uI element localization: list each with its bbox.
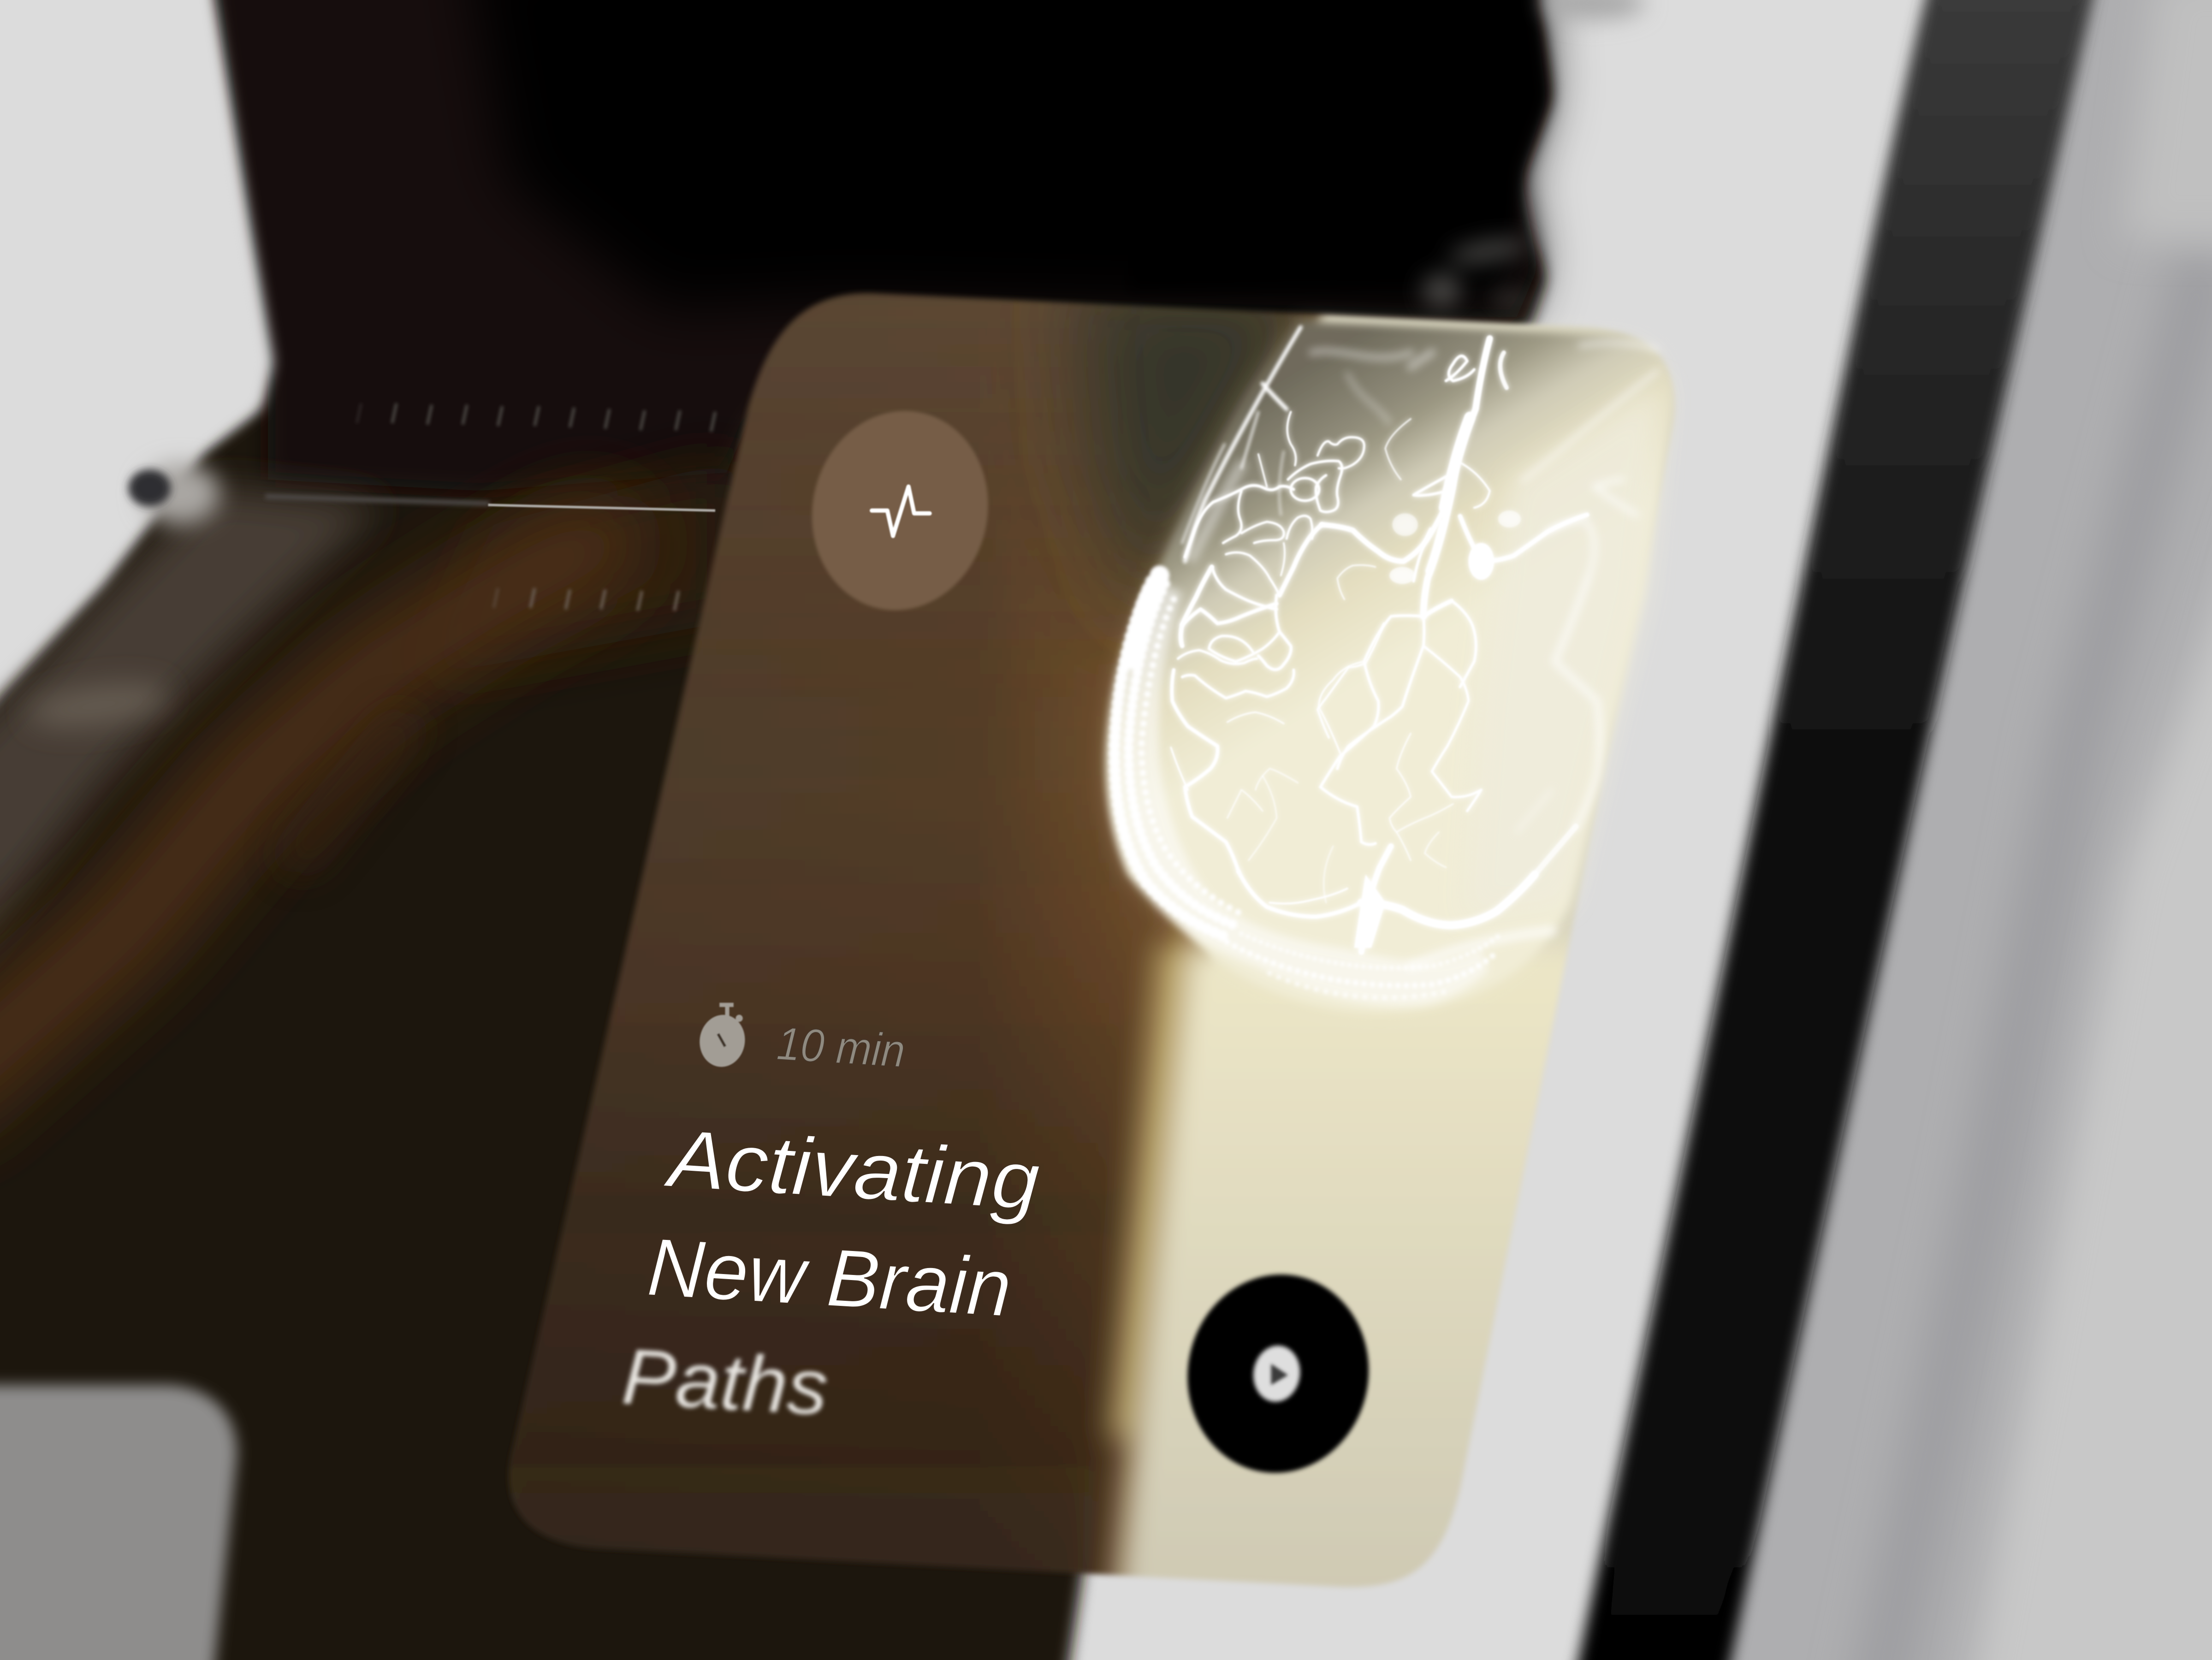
background: grey brown wedge under light panel (0, 486, 381, 973)
button disc (1172, 1260, 1384, 1487)
background: second thin streak (301, 730, 401, 855)
duration label: 10 min (775, 1018, 907, 1077)
panel: lesson card (480, 268, 1707, 1622)
background: brown hair streak (0, 543, 593, 1089)
brain right pale tissue (1467, 381, 1662, 917)
play button (1172, 1260, 1384, 1487)
lower tick marks (494, 588, 679, 611)
central branching vessels (1248, 522, 1481, 903)
circle backdrop (794, 394, 1007, 627)
play triangle (1271, 1364, 1288, 1385)
upper tick marks (357, 403, 715, 432)
title line 2: New Brain (645, 1221, 1014, 1334)
card brown shading (480, 268, 1171, 1622)
title line 3: Paths (620, 1333, 830, 1432)
bottom arc vessel (1239, 826, 1576, 952)
background: lighter patch in wedge (26, 676, 172, 735)
card upper olive shadow (1072, 268, 1354, 634)
icon: stopwatch (696, 1003, 748, 1070)
background: pale area far right (1964, 423, 2212, 1660)
brain scan image (1108, 321, 1670, 1012)
background: grey panel right of bar (1665, 0, 2212, 1660)
background: light panel edge restore (0, 0, 272, 741)
tortuous left vessels (1178, 412, 1411, 738)
brain outer glow (1108, 321, 1670, 1012)
skull band beads (1115, 575, 1498, 998)
lower left vessels (1171, 525, 1322, 872)
skull band solid (1108, 578, 1489, 1005)
background: grey blurred card, lower left (0, 1385, 237, 1660)
faded right vessels (1411, 343, 1658, 966)
background: upper right pale wedge (2123, 0, 2212, 240)
background: brown glow upper right of hair (423, 458, 734, 677)
background: crisp black edge of hair (1128, 0, 1546, 289)
card base gradient (508, 291, 1326, 1579)
faint upper vessels (1192, 351, 1432, 557)
background: soft highlight around slider knob (141, 462, 220, 525)
background: near black upper block (212, 0, 1546, 491)
background: top black band (466, 0, 1541, 317)
brain fill (1108, 321, 1670, 1012)
icon: pulse in translucent circle (794, 394, 1007, 627)
card lower warm edge (1108, 945, 1199, 1439)
background: smoky hair edge (1422, 234, 1529, 308)
title line 1: Activating (662, 1112, 1042, 1227)
upper left straight vessels (1182, 327, 1301, 561)
card upper right base (1199, 268, 1707, 987)
play ring (1250, 1342, 1304, 1405)
background: top grey smudge (1543, 0, 1645, 20)
pulse line (872, 486, 930, 536)
slider knob (128, 470, 171, 506)
main trunk vessels (1322, 338, 1587, 617)
card lower cream section (1115, 945, 1693, 1622)
background: dark soft band on right (1876, 254, 2208, 1660)
slider line (265, 497, 715, 510)
title (620, 1112, 1042, 1432)
background: dark silhouette (0, 0, 1549, 1660)
background: black curved bar (1569, 0, 2102, 1660)
